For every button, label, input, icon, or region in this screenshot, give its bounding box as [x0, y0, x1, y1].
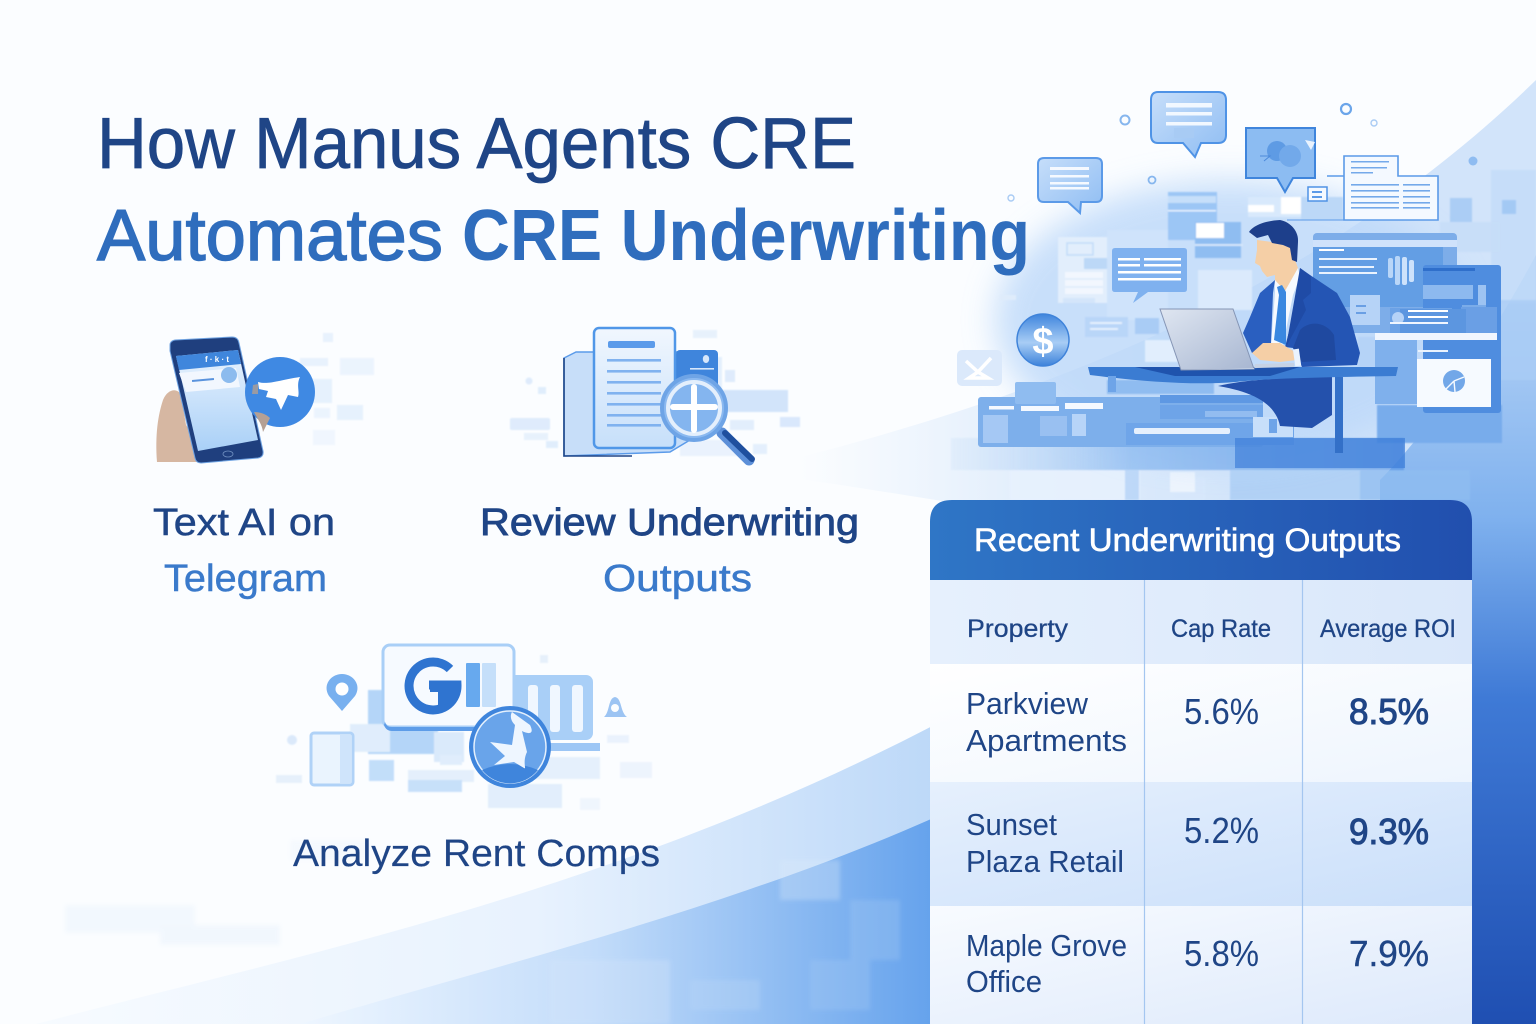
icon: hand holding phone: f·k·t — [205, 355, 229, 364]
small pins — [1008, 104, 1478, 201]
icon: Telegram-style circle — [245, 357, 315, 432]
row: Maple Grove Office — [966, 928, 1429, 999]
hero illustration: analyst at a laptop with floating data — [951, 92, 1536, 470]
speech bubble cloud — [1246, 128, 1315, 192]
suit left — [1243, 280, 1275, 353]
icon: bar chart panel — [505, 675, 600, 751]
column header: Property: Property — [967, 615, 1069, 643]
neck and face — [1255, 240, 1298, 293]
title — [97, 104, 1030, 276]
side dashboard panel — [1375, 265, 1501, 413]
desk and legs — [1088, 367, 1398, 453]
icon: hand holding phone — [156, 337, 263, 463]
table header bar — [930, 500, 1472, 580]
white chart card — [1417, 359, 1491, 407]
icon: map pin — [327, 674, 357, 711]
row: Sunset Plaza Retail: 9.3% — [1349, 811, 1429, 852]
row: Maple Grove Office: 5.8% — [1184, 933, 1259, 974]
label: Text AI on: Text AI on — [153, 502, 335, 544]
row: Sunset Plaza Retail — [966, 807, 1429, 879]
faint pixel blocks — [510, 330, 800, 456]
icon: envelope tile — [957, 350, 1002, 386]
panel: recent underwriting outputs table — [930, 500, 1472, 1024]
row: Maple Grove Office: Maple Grove — [966, 928, 1127, 963]
icon: badge circle — [469, 706, 551, 788]
row: Sunset Plaza Retail: Plaza Retail — [966, 844, 1124, 879]
monitor panel — [1313, 233, 1457, 333]
column header: Average ROI: Average ROI — [1320, 615, 1456, 643]
row: Parkview Apartments — [966, 686, 1429, 758]
icon: magnifying glass with plus — [662, 376, 752, 460]
row: Parkview Apartments: 8.5% — [1349, 691, 1429, 732]
hero soft background blocks — [995, 170, 1536, 460]
icon: G search card — [383, 645, 514, 731]
table title: Recent Underwriting Outputs — [974, 522, 1401, 558]
step: analyze rent comps — [276, 645, 660, 875]
speech bubble top — [1151, 92, 1226, 157]
row: Maple Grove Office: 7.9% — [1349, 933, 1429, 974]
title line 2: CRE Underwriting: CRE Underwriting — [462, 196, 1030, 276]
label: Telegram: Telegram — [164, 558, 327, 600]
label: Outputs: Outputs — [603, 558, 752, 600]
blocks strip above table — [1010, 470, 1470, 500]
businessman — [1243, 220, 1360, 367]
label: Analyze Rent Comps: Analyze Rent Comps — [293, 833, 660, 875]
icon: bell — [604, 697, 627, 717]
faint pixel blocks — [276, 655, 652, 810]
shirt — [1271, 268, 1300, 345]
faint pixel blocks — [300, 333, 374, 445]
hair — [1249, 220, 1298, 262]
label: Review Underwriting: Review Underwriting — [480, 502, 859, 544]
title line 2: Automates: Automates — [97, 196, 443, 276]
step: review underwriting outputs — [480, 328, 859, 600]
row: Parkview Apartments: 5.6% — [1184, 691, 1259, 732]
suit right — [1285, 268, 1360, 367]
laptop — [1160, 309, 1294, 370]
column header: Cap Rate: Cap Rate — [1171, 615, 1271, 643]
document table graphic — [1287, 156, 1438, 220]
step: text AI on Telegram — [153, 333, 374, 600]
table rows — [930, 580, 1472, 1024]
icon: dollar coin: $ — [1032, 321, 1054, 363]
foreground data blocks — [951, 382, 1405, 470]
icon: dollar coin — [1017, 314, 1069, 366]
icon: stacked documents — [564, 328, 718, 456]
speech bubble dark — [1112, 248, 1187, 303]
row: Parkview Apartments: Apartments — [966, 723, 1127, 758]
speech bubble left — [1038, 158, 1102, 213]
row: Sunset Plaza Retail: Sunset — [966, 807, 1057, 842]
tie — [1274, 285, 1286, 345]
row: Sunset Plaza Retail: 5.2% — [1184, 810, 1259, 851]
hands — [1252, 343, 1297, 362]
row: Parkview Apartments: Parkview — [966, 686, 1089, 721]
title line 1: How Manus Agents CRE — [97, 104, 856, 184]
row: Maple Grove Office: Office — [966, 964, 1042, 999]
icon: tablet — [311, 733, 353, 785]
